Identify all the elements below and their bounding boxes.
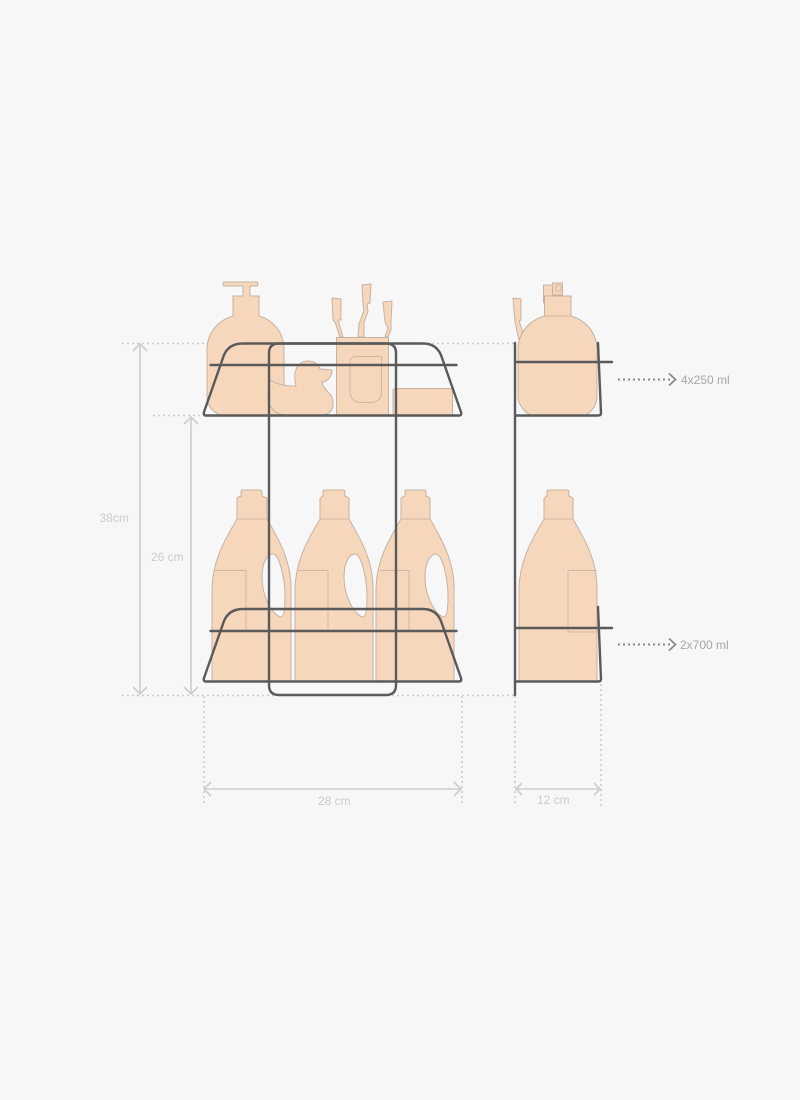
- arrow: to 2x700 ml: [618, 638, 676, 650]
- lower basket: [204, 609, 461, 682]
- wire frame upright: [269, 344, 396, 695]
- side toothbrush: [513, 298, 523, 342]
- dimension guide lines: [122, 344, 601, 806]
- arrow: 38cm height: [133, 344, 147, 694]
- cup with label: [336, 338, 388, 416]
- label: 28 cm: 28 cm: [318, 794, 351, 808]
- detergent bottle 3: [376, 490, 454, 681]
- side view: products and shelf: [513, 283, 612, 695]
- front view: products and shelf: [204, 282, 461, 695]
- label: 12 cm: 12 cm: [537, 793, 570, 807]
- arrow: to 4x250 ml: [618, 374, 676, 386]
- label: 38cm: 38cm: [100, 511, 129, 525]
- side wire frame: [515, 343, 612, 695]
- label: 4x250 ml: 4x250 ml: [681, 373, 730, 387]
- side pump: [544, 283, 562, 303]
- label: 2x700 ml: 2x700 ml: [680, 638, 729, 652]
- detergent bottle 2: [295, 490, 373, 681]
- side soap bottle: [518, 296, 597, 416]
- arrow: 28 cm width: [204, 782, 461, 796]
- upper basket: [204, 344, 461, 416]
- toothbrushes: [332, 284, 392, 337]
- label: 26 cm: 26 cm: [151, 550, 184, 564]
- soap bar: [393, 388, 452, 416]
- arrow: 12 cm width: [516, 783, 600, 795]
- detergent bottle 1: [212, 490, 291, 681]
- rubber duck: [268, 361, 333, 415]
- pump soap bottle: [207, 282, 284, 415]
- side detergent bottle: [519, 490, 597, 681]
- arrow: 26 cm height: [184, 417, 198, 694]
